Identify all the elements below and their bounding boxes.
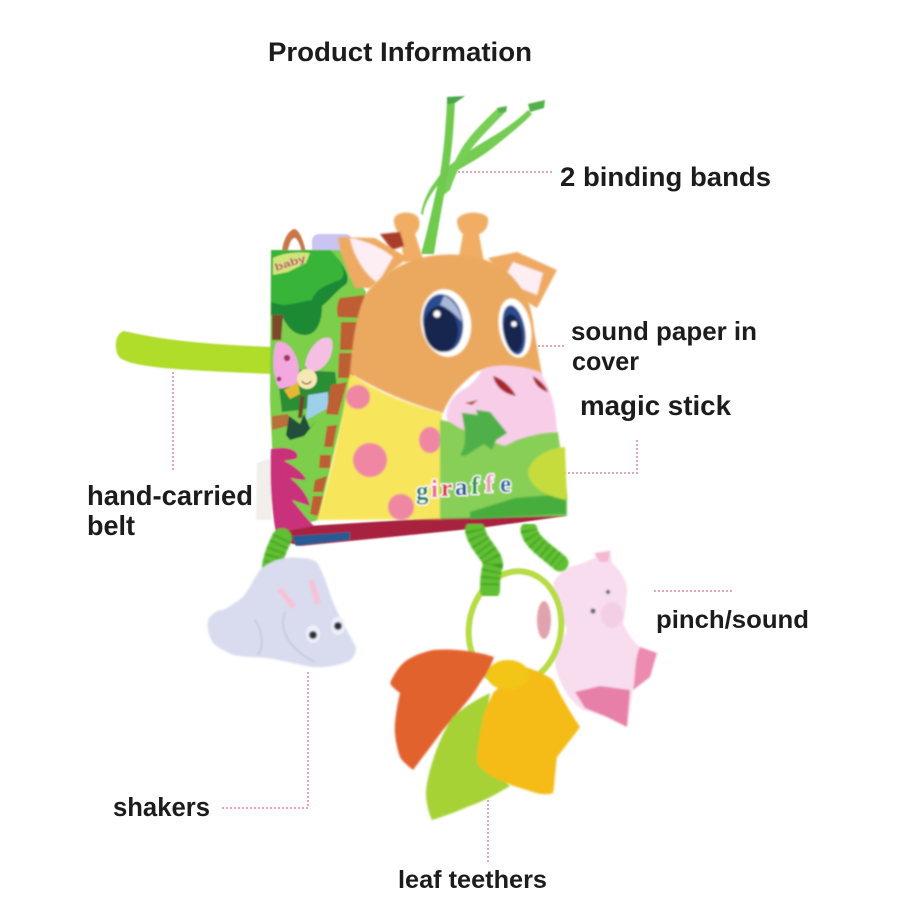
giraffe word: g [416,478,429,505]
giraffe word: a [455,474,468,501]
label: hand-carried belt: belt [87,510,135,541]
icon: binding bands [421,96,545,254]
giraffe word: i [431,476,438,503]
label: leaf teethers: leaf teethers [398,866,547,894]
green leaf [426,693,510,820]
icon: elastic ties [272,530,560,590]
magic stick velcro tab [528,447,567,500]
yellow leaf [477,667,580,794]
giraffe neck [317,373,442,520]
label: hand-carried belt: hand-carried [87,480,253,511]
title: Product Information [268,37,532,67]
giraffe word: e [500,471,511,498]
label: hand-carried belt [87,480,253,541]
clip [487,660,529,690]
giraffe ears [338,237,557,308]
neck spots [346,385,441,520]
leader lines [173,172,733,862]
giraffe word: f [471,473,480,500]
giraffe snout [447,366,557,446]
giraffe word [416,471,511,505]
brick edge [310,295,365,516]
bee and butterfly [273,338,333,399]
cloth book [208,213,657,820]
giraffe word: r [441,475,452,502]
label: shakers: shakers [113,794,210,822]
label: pinch/sound: pinch/sound [656,606,809,634]
label: magic stick: magic stick [580,390,732,421]
icon: pink pig [537,550,657,727]
left eye [417,286,475,360]
label: sound paper in cover: sound paper in [571,316,757,346]
lower right green panel [440,420,567,519]
icon: teether ring [460,564,570,692]
grass [470,494,566,519]
orange leaf [390,649,494,770]
right eye [494,296,536,360]
label: 2 binding bands: 2 binding bands [560,162,771,192]
giraffe word: f [485,471,494,498]
left jungle panel [270,250,366,533]
icon: rabbit shaker [208,558,356,667]
icon: hand-carried belt [116,331,272,374]
label: sound paper in cover [571,316,757,376]
icon: leaf teethers [390,649,580,820]
green leaf on snout [460,410,507,456]
label: sound paper in cover: cover [572,346,639,376]
small logo: baby [274,253,308,274]
back pages and tabs [256,229,566,546]
giraffe horns [394,213,488,262]
giraffe face [350,254,542,413]
